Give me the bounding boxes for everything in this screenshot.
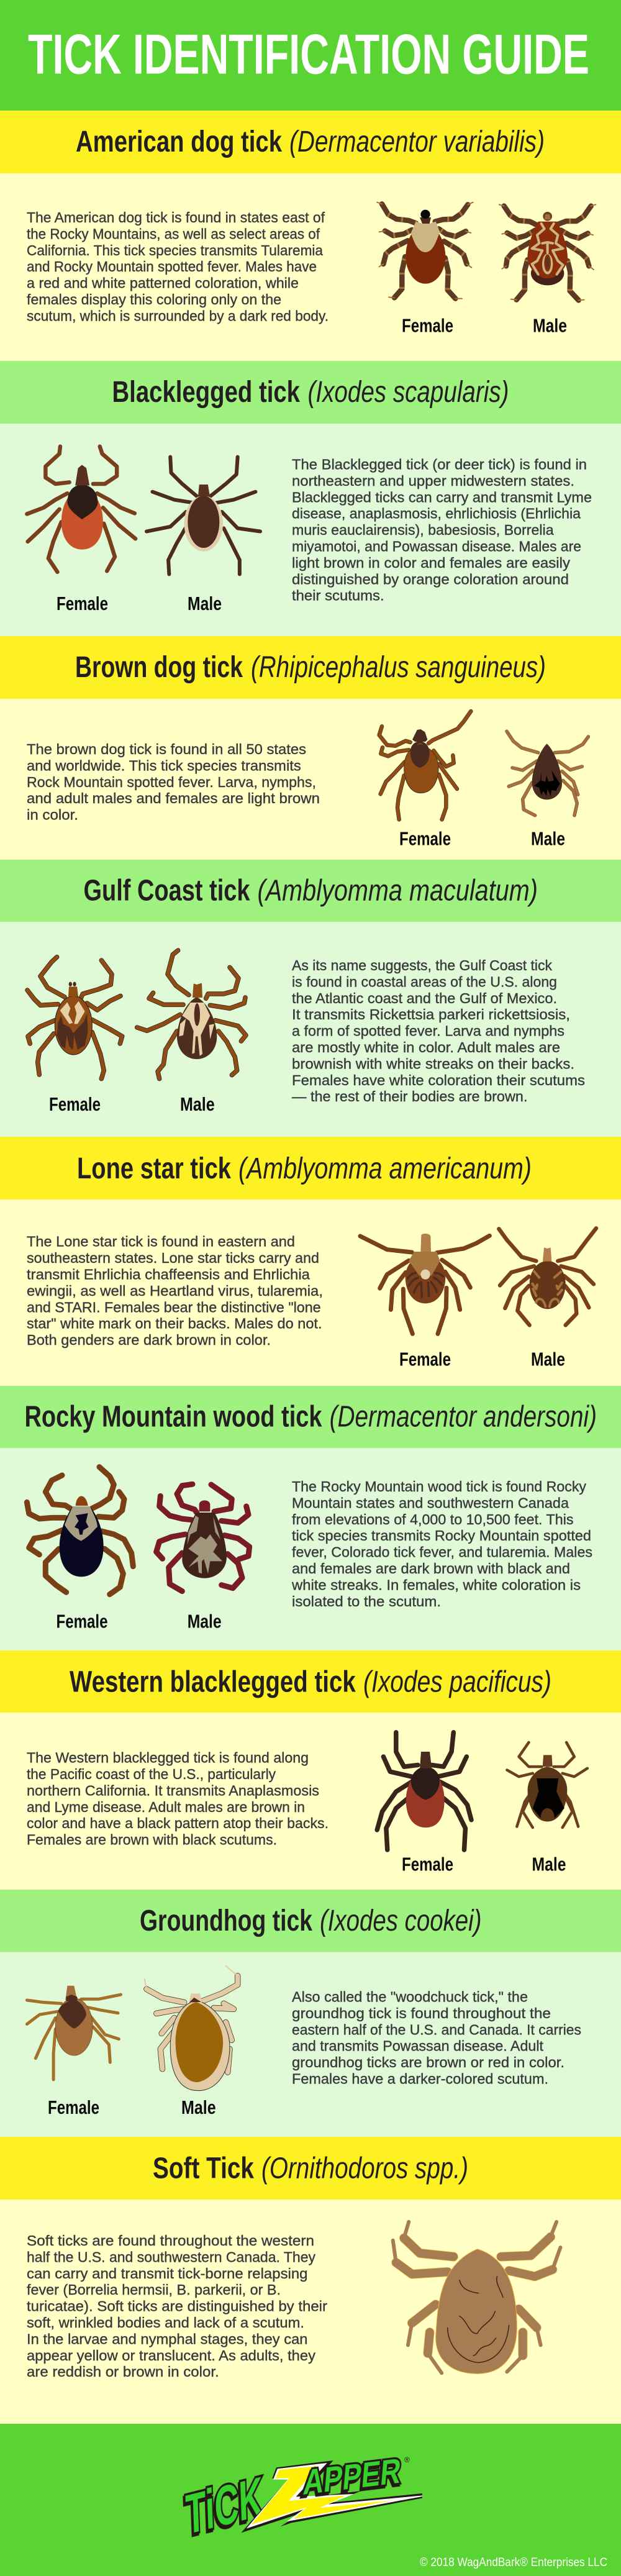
text block: Soft Tick description: appear yellow or translucent. As adults, they xyxy=(27,2347,316,2364)
text block: Groundhog tick description: groundhog ticks are brown or red in color. xyxy=(292,2054,564,2070)
label: Female: Female xyxy=(399,1348,451,1370)
text block: Blacklegged tick description: their scutums. xyxy=(292,588,384,604)
text block: Rocky Mountain wood tick description: white streaks. In females, white coloration is xyxy=(291,1577,581,1593)
heading: Blacklegged tick xyxy=(112,376,509,409)
panel: Rocky Mountain wood tick xyxy=(0,1386,621,1650)
footer banner xyxy=(0,2424,621,2576)
label: Male: Male xyxy=(181,2096,216,2118)
text block: Brown dog tick description: The brown dog tick is found in all 50 states xyxy=(27,741,306,757)
label: Female: Female xyxy=(402,315,453,337)
icon: American dog tick male xyxy=(499,204,596,300)
icon: Lone star tick female xyxy=(360,1234,489,1334)
heading: Brown dog tick xyxy=(75,651,546,684)
icon: Brown dog tick female xyxy=(379,711,471,819)
text block: Brown dog tick description: and adult males and females are light brown xyxy=(27,790,320,806)
text block: Blacklegged tick description xyxy=(292,456,592,604)
text block: Lone star tick description: southeastern states. Lone star ticks carry and xyxy=(27,1250,319,1266)
panel: American dog tick xyxy=(0,111,621,361)
text block: American dog tick description: females display this coloring only on the xyxy=(27,291,281,307)
text block: Soft Tick description: In the larvae and nymphal stages, they can xyxy=(27,2331,308,2347)
heading: Western blacklegged tick: Western blacklegged tick xyxy=(70,1666,356,1698)
heading: Rocky Mountain wood tick xyxy=(25,1401,597,1434)
heading: Soft Tick: Soft Tick xyxy=(153,2152,254,2185)
panel: Blacklegged tick xyxy=(0,361,621,636)
panel: Brown dog tick xyxy=(0,636,621,860)
text block: Soft Tick description: fever (Borrelia hermsii, B. parkerii, or B. xyxy=(27,2282,281,2298)
text block: Gulf Coast tick description: — the rest of their bodies are brown. xyxy=(292,1088,528,1104)
text block: Western blacklegged tick description xyxy=(27,1750,329,1848)
text block: Soft Tick description: half the U.S. and southwestern Canada. They xyxy=(27,2249,315,2265)
text block: Soft Tick description: can carry and transmit tick-borne relapsing xyxy=(27,2265,308,2282)
text block: Gulf Coast tick description: As its name suggests, the Gulf Coast tick xyxy=(292,957,552,973)
text block: Rocky Mountain wood tick description: Mountain states and southwestern Canada xyxy=(292,1495,569,1511)
panel: Western blacklegged tick xyxy=(0,1650,621,1890)
text block: Blacklegged tick description: muris eauclairensis), babesiosis, Borrelia xyxy=(292,522,554,538)
text block: Gulf Coast tick description: It transmits Rickettsia parkeri rickettsiosis, xyxy=(292,1006,570,1022)
text block: Gulf Coast tick description xyxy=(292,957,585,1104)
icon: Rocky Mountain wood tick male xyxy=(156,1484,250,1591)
heading: American dog tick xyxy=(76,125,545,158)
text block: Rocky Mountain wood tick description: from elevations of 4,000 to 10,500 feet. This xyxy=(292,1511,574,1527)
label: Female: Female xyxy=(402,1854,453,1875)
heading: American dog tick: American dog tick xyxy=(76,125,282,158)
title banner xyxy=(0,0,621,111)
icon: Western blacklegged tick female xyxy=(377,1732,471,1850)
text block: Lone star tick description: Both genders are dark brown in color. xyxy=(27,1332,271,1348)
text block: Brown dog tick description xyxy=(27,741,320,823)
text block: Groundhog tick description: Females have a darker-colored scutum. xyxy=(292,2071,548,2087)
text block: Groundhog tick description: Also called the "woodchuck tick," the xyxy=(292,1989,528,2005)
text block: Soft Tick description: are reddish or brown in color. xyxy=(27,2364,219,2380)
copyright: © 2018 WagAndBark® Enterprises LLC xyxy=(420,2556,607,2569)
text block: Western blacklegged tick description: color and have a black pattern atop their backs. xyxy=(27,1815,329,1831)
icon: Groundhog tick male xyxy=(145,1966,238,2091)
heading: Soft Tick: (Ornithodoros spp.) xyxy=(261,2152,468,2185)
logo: Tick Zapper: TiCK xyxy=(184,2464,264,2546)
text block: Western blacklegged tick description: and Lyme disease. Adult males are brown in xyxy=(27,1799,305,1815)
text block: Lone star tick description xyxy=(27,1234,323,1348)
text block: Blacklegged tick description: miyamotoi, and Powassan disease. Males are xyxy=(292,538,581,554)
text block: Gulf Coast tick description: brownish with white streaks on their backs. xyxy=(292,1055,574,1072)
heading: Brown dog tick: (Rhipicephalus sanguineus) xyxy=(251,651,546,684)
text block: Gulf Coast tick description: are mostly white in color. Adult males are xyxy=(292,1039,560,1055)
text block: Blacklegged tick description: The Blacklegged tick (or deer tick) is found in xyxy=(292,456,587,472)
text block: Rocky Mountain wood tick description: isolated to the scutum. xyxy=(292,1593,441,1609)
text block: Lone star tick description: ewingii, as well as Heartland virus, tularemia, xyxy=(27,1283,323,1299)
text block: Western blacklegged tick description: The Western blacklegged tick is found along xyxy=(27,1750,309,1766)
label: Male: Male xyxy=(188,593,222,614)
logo: Tick Zapper xyxy=(184,2451,422,2546)
heading: Gulf Coast tick: (Amblyomma maculatum) xyxy=(257,875,538,908)
heading: Lone star tick: (Amblyomma americanum) xyxy=(238,1152,532,1185)
panel: Lone star tick xyxy=(0,1137,621,1386)
label: Male: Male xyxy=(532,1854,566,1875)
logo: Tick Zapper: ® xyxy=(404,2455,410,2464)
text block: Soft Tick description: soft, wrinkled bodies and lack of a scutum. xyxy=(27,2314,304,2331)
text block: Rocky Mountain wood tick description: tick species transmits Rocky Mountain spotted xyxy=(292,1527,591,1544)
label: Female: Female xyxy=(49,1093,101,1115)
heading: Gulf Coast tick xyxy=(83,875,538,908)
icon: Soft tick xyxy=(393,2222,560,2373)
text block: Brown dog tick description: in color. xyxy=(27,807,78,823)
heading: Groundhog tick: (Ixodes cookei) xyxy=(320,1905,482,1937)
text block: American dog tick description: a red and white patterned coloration, while xyxy=(27,275,299,291)
label: Female: Female xyxy=(56,1611,108,1632)
text block: Lone star tick description: The Lone star tick is found in eastern and xyxy=(27,1234,295,1250)
icon: Gulf Coast tick male xyxy=(137,950,246,1079)
heading: Blacklegged tick: (Ixodes scapularis) xyxy=(308,376,509,409)
text block: Soft Tick description xyxy=(27,2232,327,2380)
text block: Western blacklegged tick description: the Pacific coast of the U.S., particularly xyxy=(27,1766,276,1782)
heading: Brown dog tick: Brown dog tick xyxy=(75,651,243,684)
icon: Brown dog tick male xyxy=(507,731,588,816)
label: Female: Female xyxy=(399,828,451,850)
text block: Gulf Coast tick description: is found in coastal areas of the U.S. along xyxy=(292,973,557,990)
text block: Groundhog tick description: groundhog tick is found throughout the xyxy=(292,2005,551,2021)
text block: American dog tick description: California. This tick species transmits Tularemia xyxy=(27,242,323,258)
text block: Gulf Coast tick description: the Atlantic coast and the Gulf of Mexico. xyxy=(292,990,557,1006)
heading: Lone star tick: Lone star tick xyxy=(77,1152,231,1185)
text block: Rocky Mountain wood tick description: and females are dark brown with black and xyxy=(292,1560,570,1577)
text block: Groundhog tick description xyxy=(292,1989,581,2087)
text block: Rocky Mountain wood tick description: The Rocky Mountain wood tick is found Rocky xyxy=(292,1478,586,1495)
text block: Brown dog tick description: and worldwide. This tick species transmits xyxy=(27,757,301,773)
heading: Western blacklegged tick: (Ixodes pacificus) xyxy=(363,1666,551,1698)
icon: Blacklegged tick male xyxy=(147,457,260,574)
panel: Gulf Coast tick xyxy=(0,860,621,1137)
heading: Rocky Mountain wood tick: Rocky Mountain wood tick xyxy=(25,1401,322,1434)
heading: Gulf Coast tick: Gulf Coast tick xyxy=(83,875,250,908)
heading: Groundhog tick xyxy=(140,1905,482,1937)
icon: Blacklegged tick female xyxy=(27,447,135,572)
text block: American dog tick description: The American dog tick is found in states east of xyxy=(27,209,325,225)
text block: Blacklegged tick description: disease, anaplasmosis, ehrlichiosis (Ehrlichia xyxy=(292,506,581,522)
label: Female: Female xyxy=(48,2096,99,2118)
icon: Gulf Coast tick female xyxy=(27,957,122,1079)
label: Female: Female xyxy=(57,593,108,614)
icon: Rocky Mountain wood tick female xyxy=(27,1467,133,1595)
text block: American dog tick description: and Rocky Mountain spotted fever. Males have xyxy=(27,258,317,275)
heading: American dog tick: (Dermacentor variabilis) xyxy=(289,125,545,158)
label: Male: Male xyxy=(533,315,567,337)
text block: American dog tick description: the Rocky Mountains, as well as select areas of xyxy=(27,225,320,242)
panel: Groundhog tick xyxy=(0,1890,621,2137)
text block: Western blacklegged tick description: northern California. It transmits Anaplasmosis xyxy=(27,1782,319,1798)
label: Male: Male xyxy=(531,828,565,850)
text block: American dog tick description xyxy=(27,209,329,324)
text block: Western blacklegged tick description: Females are brown with black scutums. xyxy=(27,1832,277,1848)
text block: Lone star tick description: star" white mark on their backs. Males do not. xyxy=(27,1316,322,1332)
label: Male: Male xyxy=(531,1348,565,1370)
label: Male: Male xyxy=(180,1093,215,1115)
heading: Blacklegged tick: Blacklegged tick xyxy=(112,376,300,409)
panel: Soft Tick xyxy=(0,2137,621,2424)
text block: American dog tick description: scutum, which is surrounded by a dark red body. xyxy=(27,307,329,324)
text block: Rocky Mountain wood tick description: fever, Colorado tick fever, and tularemia. Males xyxy=(292,1544,592,1560)
text block: Soft Tick description: Soft ticks are found throughout the western xyxy=(27,2232,314,2249)
text block: Groundhog tick description: eastern half of the U.S. and Canada. It carries xyxy=(292,2021,581,2037)
icon: Lone star tick male xyxy=(499,1228,596,1325)
label: Male: Male xyxy=(188,1611,222,1632)
heading: Soft Tick xyxy=(153,2152,468,2185)
text block: Groundhog tick description: and transmits Powassan disease. Adult xyxy=(292,2038,544,2054)
heading: Lone star tick xyxy=(77,1152,532,1185)
text block: Soft Tick description: turicatae). Soft ticks are distinguished by their xyxy=(27,2298,327,2314)
text block: Blacklegged tick description: distinguished by orange coloration around xyxy=(292,571,569,587)
text block: Brown dog tick description: Rock Mountain spotted fever. Larva, nymphs, xyxy=(27,774,316,790)
text block: Blacklegged tick description: light brown in color and females are easily xyxy=(292,555,571,571)
logo: Tick Zapper: APPER xyxy=(302,2451,402,2502)
text block: Lone star tick description: and STARI. Females bear the distinctive "lone xyxy=(27,1299,321,1315)
text block: Rocky Mountain wood tick description xyxy=(291,1478,592,1609)
text block: Gulf Coast tick description: a form of spotted fever. Larva and nymphs xyxy=(292,1023,564,1039)
text block: Gulf Coast tick description: Females have white coloration their scutums xyxy=(292,1072,585,1088)
text block: Lone star tick description: transmit Ehrlichia chaffeensis and Ehrlichia xyxy=(27,1266,310,1282)
text block: Blacklegged tick description: Blacklegged ticks can carry and transmit Lyme xyxy=(292,489,592,505)
heading: Groundhog tick: Groundhog tick xyxy=(140,1905,312,1937)
text block: Blacklegged tick description: northeastern and upper midwestern states. xyxy=(292,473,574,489)
icon: Western blacklegged tick male xyxy=(507,1742,587,1827)
icon: Groundhog tick female xyxy=(27,1986,121,2080)
icon: American dog tick female xyxy=(377,203,473,299)
